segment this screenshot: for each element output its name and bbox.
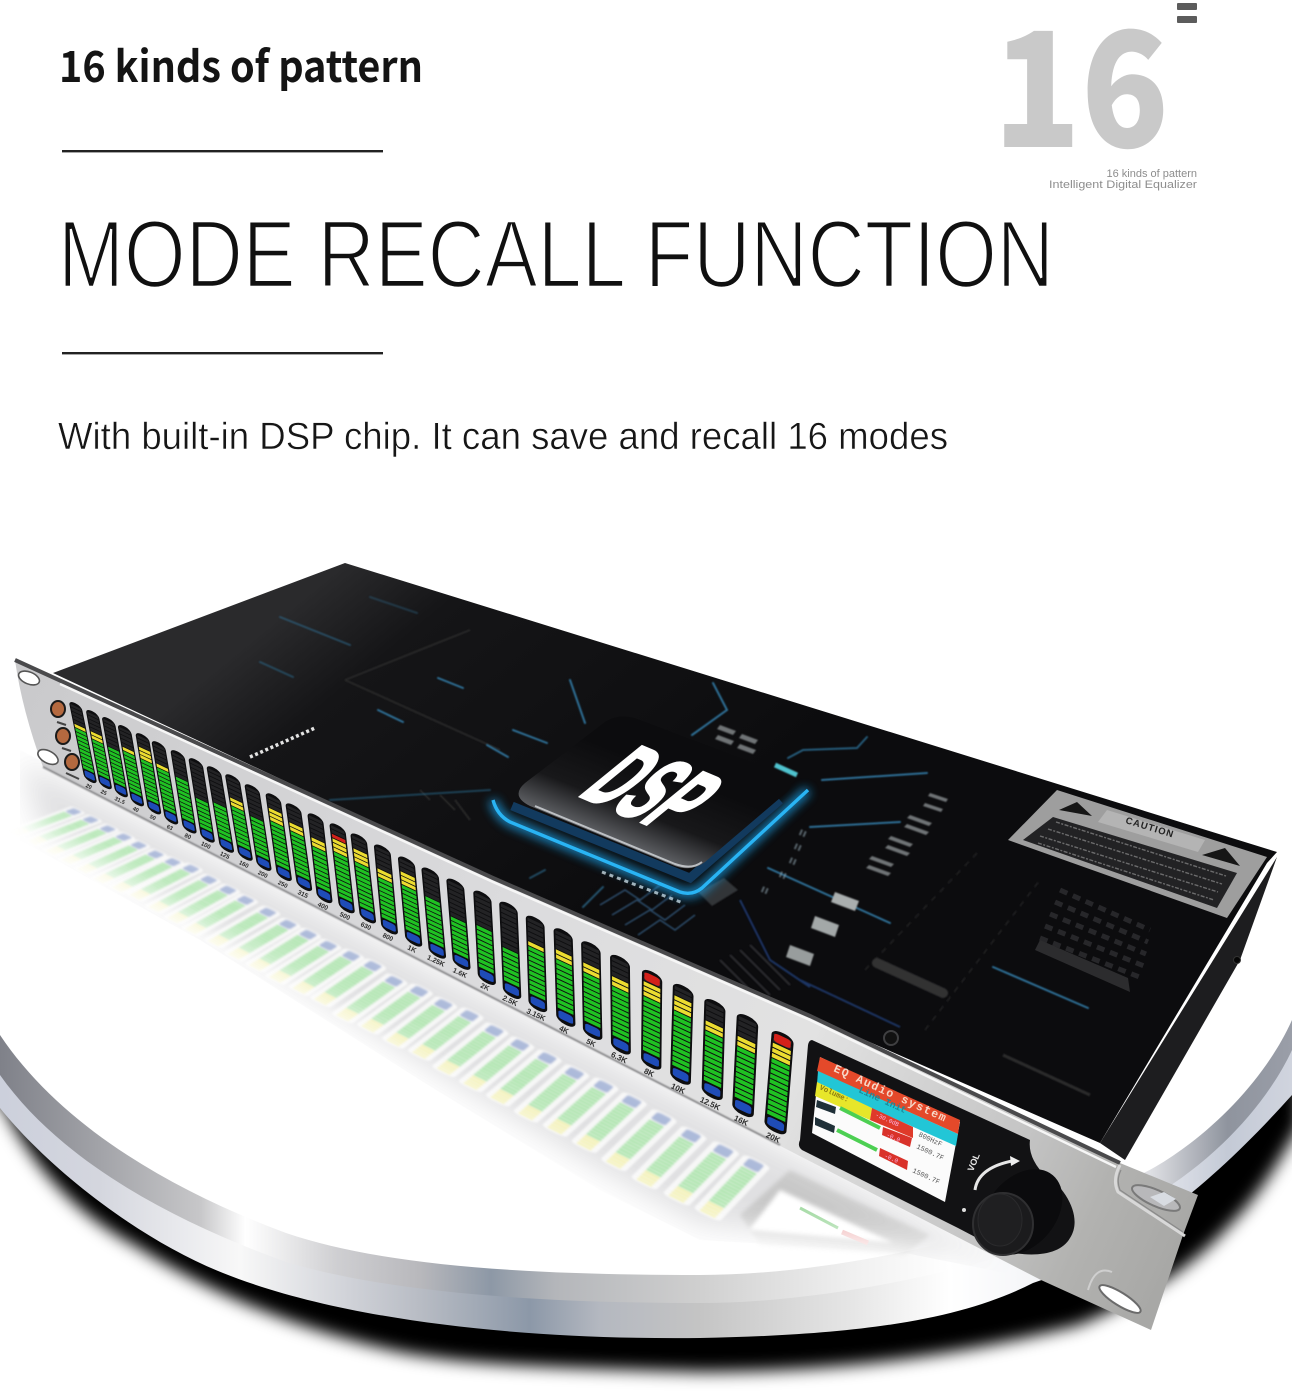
frequency band labels: 1.6K xyxy=(451,967,468,980)
screw and side port xyxy=(884,956,1240,1045)
title: MODE RECALL FUNCTION: MODE RECALL FUNCTION xyxy=(58,201,1054,308)
frequency band labels: 250 xyxy=(277,880,289,890)
chip solder pads xyxy=(602,872,683,903)
left rack ear holes xyxy=(17,668,61,767)
LCD small values: -0.0 xyxy=(885,1131,902,1144)
LCD small values: 1500.7F xyxy=(911,1167,941,1187)
frequency band labels: 16K xyxy=(732,1114,750,1128)
frequency band labels: 2K xyxy=(479,983,490,993)
frequency band labels: 500 xyxy=(338,911,351,922)
frequency band labels: 160 xyxy=(238,860,250,870)
surface-mount components xyxy=(698,725,948,966)
frequency band labels: 31.5 xyxy=(113,796,126,806)
right rack ear with slots xyxy=(1088,1165,1185,1317)
LCD small values: 1500.7F xyxy=(915,1143,945,1163)
caution label: CAUTION xyxy=(1124,815,1175,841)
frequency band labels: 50 xyxy=(148,814,156,822)
frequency band labels: 40 xyxy=(131,806,139,814)
frequency band labels: 800 xyxy=(381,932,394,943)
device side face xyxy=(1100,857,1277,1160)
heading: 16 kinds of pattern: 16 kinds of pattern xyxy=(59,33,423,95)
rule above title xyxy=(62,150,383,152)
caution label xyxy=(1008,790,1267,918)
frequency band labels: 2.5K xyxy=(501,993,520,1008)
device: DSP equalizer xyxy=(15,563,1277,1330)
LCD small values: -0.0 xyxy=(883,1152,900,1165)
subtitle text: With built-in DSP chip. It can save and recall 16 modes xyxy=(58,416,948,458)
frequency band labels: 125 xyxy=(219,851,231,861)
rule below title xyxy=(62,352,383,354)
DSP chip lettering: DSP xyxy=(558,729,748,849)
graphic: large 16 badge with caption: 16 kinds of pattern xyxy=(1106,168,1197,180)
frequency band labels: 63 xyxy=(165,824,173,832)
LCD small values: -30.0dB xyxy=(874,1111,900,1128)
graphic: large 16 badge with caption: Intelligent Digital Equalizer xyxy=(1049,179,1197,191)
faint circuit board outlines xyxy=(345,630,1090,1095)
frequency band labels: 315 xyxy=(296,889,309,900)
volume control knob with arrow and VOL label xyxy=(962,1151,1079,1271)
panel top edge xyxy=(15,660,1120,1163)
LCD small values: 800HzF xyxy=(917,1131,943,1149)
frequency band labels: 6.3K xyxy=(609,1050,629,1065)
frequency band labels: 200 xyxy=(257,870,269,880)
black bezel around display and knob xyxy=(799,1040,1075,1254)
frequency band labels: 1K xyxy=(406,945,417,955)
LCD small values xyxy=(874,1111,945,1187)
frequency band labels: 20K xyxy=(764,1131,782,1145)
frequency band labels: 8K xyxy=(643,1066,656,1079)
frequency band labels: 3.15K xyxy=(525,1006,548,1023)
LCD volume text: Volume: xyxy=(818,1084,850,1105)
circuit traces xyxy=(260,597,1088,1027)
front panel xyxy=(15,660,1198,1330)
frequency band labels: 5K xyxy=(585,1037,598,1049)
DSP chip xyxy=(493,716,808,893)
frequency band labels: 100 xyxy=(200,841,212,851)
frequency band labels: 4K xyxy=(558,1024,571,1036)
LCD line text: Line Init xyxy=(857,1085,908,1116)
LED level meters (31 bands) xyxy=(68,700,794,1137)
LCD display xyxy=(812,1057,960,1202)
mirrored reflection of the front panel on the disc xyxy=(20,764,968,1258)
disc platform xyxy=(0,900,1292,1372)
frequency band labels: 1.25K xyxy=(426,955,446,969)
device top surface xyxy=(53,563,1277,1143)
frequency band labels: 12.5K xyxy=(698,1095,722,1112)
frequency band labels: 400 xyxy=(316,901,329,912)
left buttons xyxy=(51,701,79,779)
volume control knob with arrow and VOL label: VOL xyxy=(966,1151,982,1173)
frequency band labels: 10K xyxy=(669,1082,687,1096)
frequency band labels xyxy=(84,783,782,1145)
LCD title text: EQ Audio system xyxy=(831,1063,948,1125)
frequency band labels: 80 xyxy=(183,833,192,842)
heat vent grid xyxy=(1040,890,1150,978)
frequency band labels: 20 xyxy=(84,783,92,791)
frequency band labels: 25 xyxy=(99,789,107,797)
frequency band labels: 630 xyxy=(359,921,372,932)
